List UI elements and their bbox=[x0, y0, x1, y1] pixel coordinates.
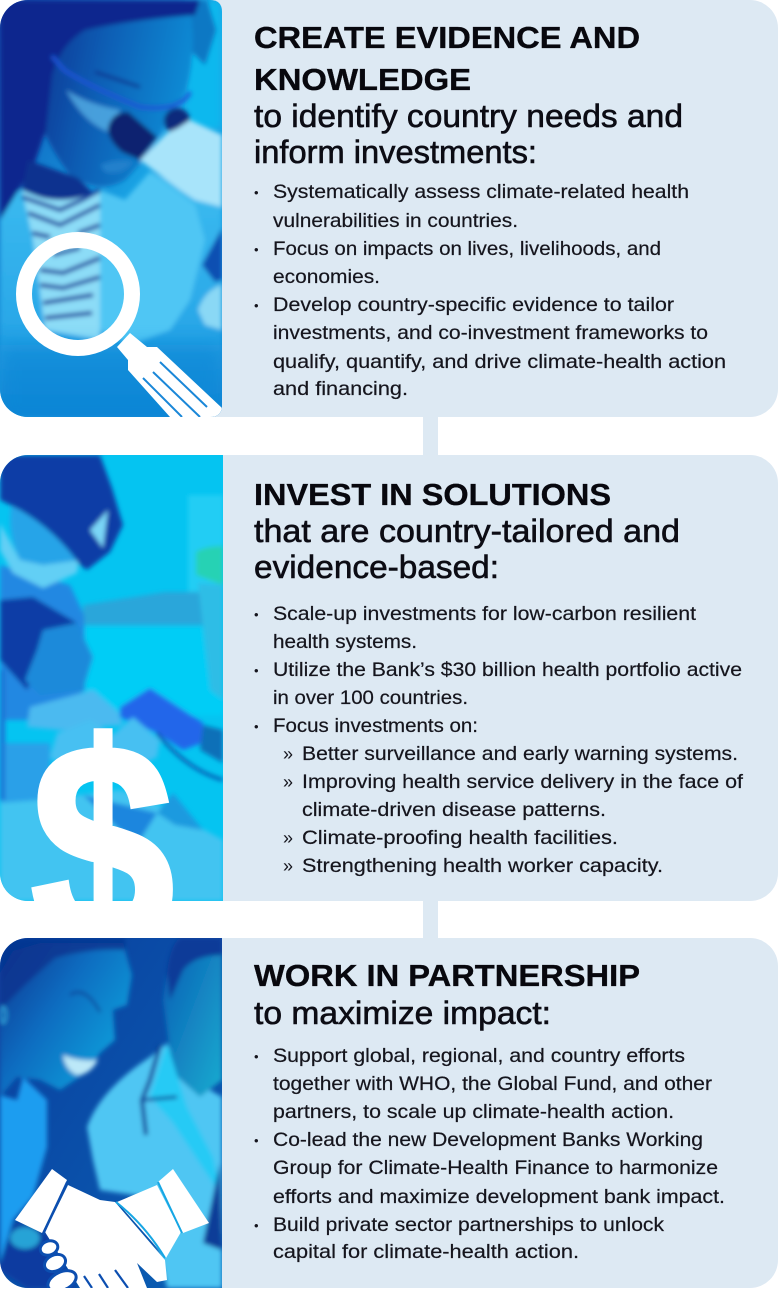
text block: evidence bullets: Develop country-specific evidence to tailor bbox=[273, 294, 675, 316]
heading: invest in solutions bbox=[254, 477, 680, 585]
connector: between second and third panel bbox=[423, 899, 438, 940]
text block: evidence bullets: qualify, quantify, and drive climate-health action bbox=[273, 351, 726, 373]
text block: evidence bullets: investments, and co-investment frameworks to bbox=[273, 322, 708, 344]
text block: partnership bullets: Support global, regional, and country efforts bbox=[273, 1045, 685, 1067]
text block: evidence bullets: economies. bbox=[273, 266, 380, 288]
text block: investment bullets: Improving health service delivery in the face of bbox=[302, 771, 744, 793]
text block: evidence bullets: • bbox=[254, 185, 259, 200]
text block: evidence bullets: Focus on impacts on lives, livelihoods, and bbox=[273, 238, 661, 260]
heading: work in partnership: to maximize impact: bbox=[254, 995, 551, 1031]
text block: investment bullets: Climate-proofing health facilities. bbox=[302, 827, 618, 849]
icon: dollar sign: $ bbox=[31, 685, 174, 1011]
heading: create evidence: CREATE EVIDENCE AND bbox=[254, 20, 640, 55]
heading: create evidence: inform investments: bbox=[254, 134, 537, 170]
icon: magnifying glass bbox=[24, 240, 222, 417]
photo: nurse with baby bbox=[0, 455, 223, 901]
panel: work in partnership bbox=[0, 938, 778, 1291]
heading: invest in solutions: evidence-based: bbox=[254, 549, 499, 585]
panel background bbox=[0, 0, 778, 417]
text block: evidence bullets: and financing. bbox=[273, 378, 408, 400]
text block: investment bullets: • bbox=[254, 663, 259, 678]
text block: partnership bullets: efforts and maximize development bank impact. bbox=[273, 1186, 725, 1208]
text block: partnership bullets: together with WHO, the Global Fund, and other bbox=[273, 1073, 713, 1095]
text block: investment bullets: in over 100 countries. bbox=[273, 687, 468, 709]
heading: create evidence bbox=[254, 20, 683, 170]
text block: partnership bullets: capital for climate-health action. bbox=[273, 1241, 579, 1263]
text block: partnership bullets bbox=[254, 1045, 725, 1263]
text block: investment bullets: Utilize the Bank’s $30 billion health portfolio active bbox=[273, 659, 742, 681]
text block: investment bullets: Strengthening health worker capacity. bbox=[302, 855, 663, 877]
text block: investment bullets: » bbox=[283, 772, 293, 792]
photo: scientist at microscope bbox=[0, 0, 222, 425]
text block: investment bullets: » bbox=[283, 856, 293, 876]
heading: work in partnership bbox=[254, 958, 640, 1031]
text block: evidence bullets: • bbox=[254, 242, 259, 257]
text block: investment bullets: • bbox=[254, 607, 259, 622]
panel: create evidence and knowledge bbox=[0, 0, 778, 425]
panel background bbox=[0, 455, 778, 901]
panel: invest in solutions bbox=[0, 455, 778, 901]
heading: create evidence: to identify country needs and bbox=[254, 98, 683, 134]
text block: partnership bullets: • bbox=[254, 1049, 259, 1064]
text block: investment bullets: Focus investments on: bbox=[273, 715, 478, 737]
text block: investment bullets: » bbox=[283, 828, 293, 848]
text block: partnership bullets: Co-lead the new Development Banks Working bbox=[273, 1129, 703, 1151]
text block: investment bullets: Scale-up investments for low-carbon resilient bbox=[273, 603, 697, 625]
text block: investment bullets: health systems. bbox=[273, 631, 417, 653]
text block: partnership bullets: Group for Climate-Health Finance to harmonize bbox=[273, 1157, 718, 1179]
text block: investment bullets: • bbox=[254, 719, 259, 734]
heading: create evidence: KNOWLEDGE bbox=[254, 62, 471, 97]
text block: partnership bullets: Build private sector partnerships to unlock bbox=[273, 1214, 664, 1236]
text block: investment bullets bbox=[254, 603, 744, 877]
heading: invest in solutions: INVEST IN SOLUTIONS bbox=[254, 477, 611, 512]
text block: evidence bullets: vulnerabilities in countries. bbox=[273, 210, 518, 232]
icon: handshake bbox=[15, 1169, 209, 1291]
text block: investment bullets: » bbox=[283, 744, 293, 764]
heading: work in partnership: WORK IN PARTNERSHIP bbox=[254, 958, 640, 993]
text block: investment bullets: climate-driven disease patterns. bbox=[302, 799, 606, 821]
text block: partnership bullets: • bbox=[254, 1218, 259, 1233]
photo: two health workers bbox=[0, 938, 222, 1291]
panel background bbox=[0, 938, 778, 1288]
text block: evidence bullets bbox=[254, 181, 726, 400]
text block: evidence bullets: • bbox=[254, 298, 259, 313]
connector: between first and second panel bbox=[423, 415, 438, 457]
text block: partnership bullets: partners, to scale up climate-health action. bbox=[273, 1101, 674, 1123]
text block: partnership bullets: • bbox=[254, 1133, 259, 1148]
text block: evidence bullets: Systematically assess climate-related health bbox=[273, 181, 689, 203]
heading: invest in solutions: that are country-tailored and bbox=[254, 513, 680, 549]
text block: investment bullets: Better surveillance and early warning systems. bbox=[302, 743, 738, 765]
